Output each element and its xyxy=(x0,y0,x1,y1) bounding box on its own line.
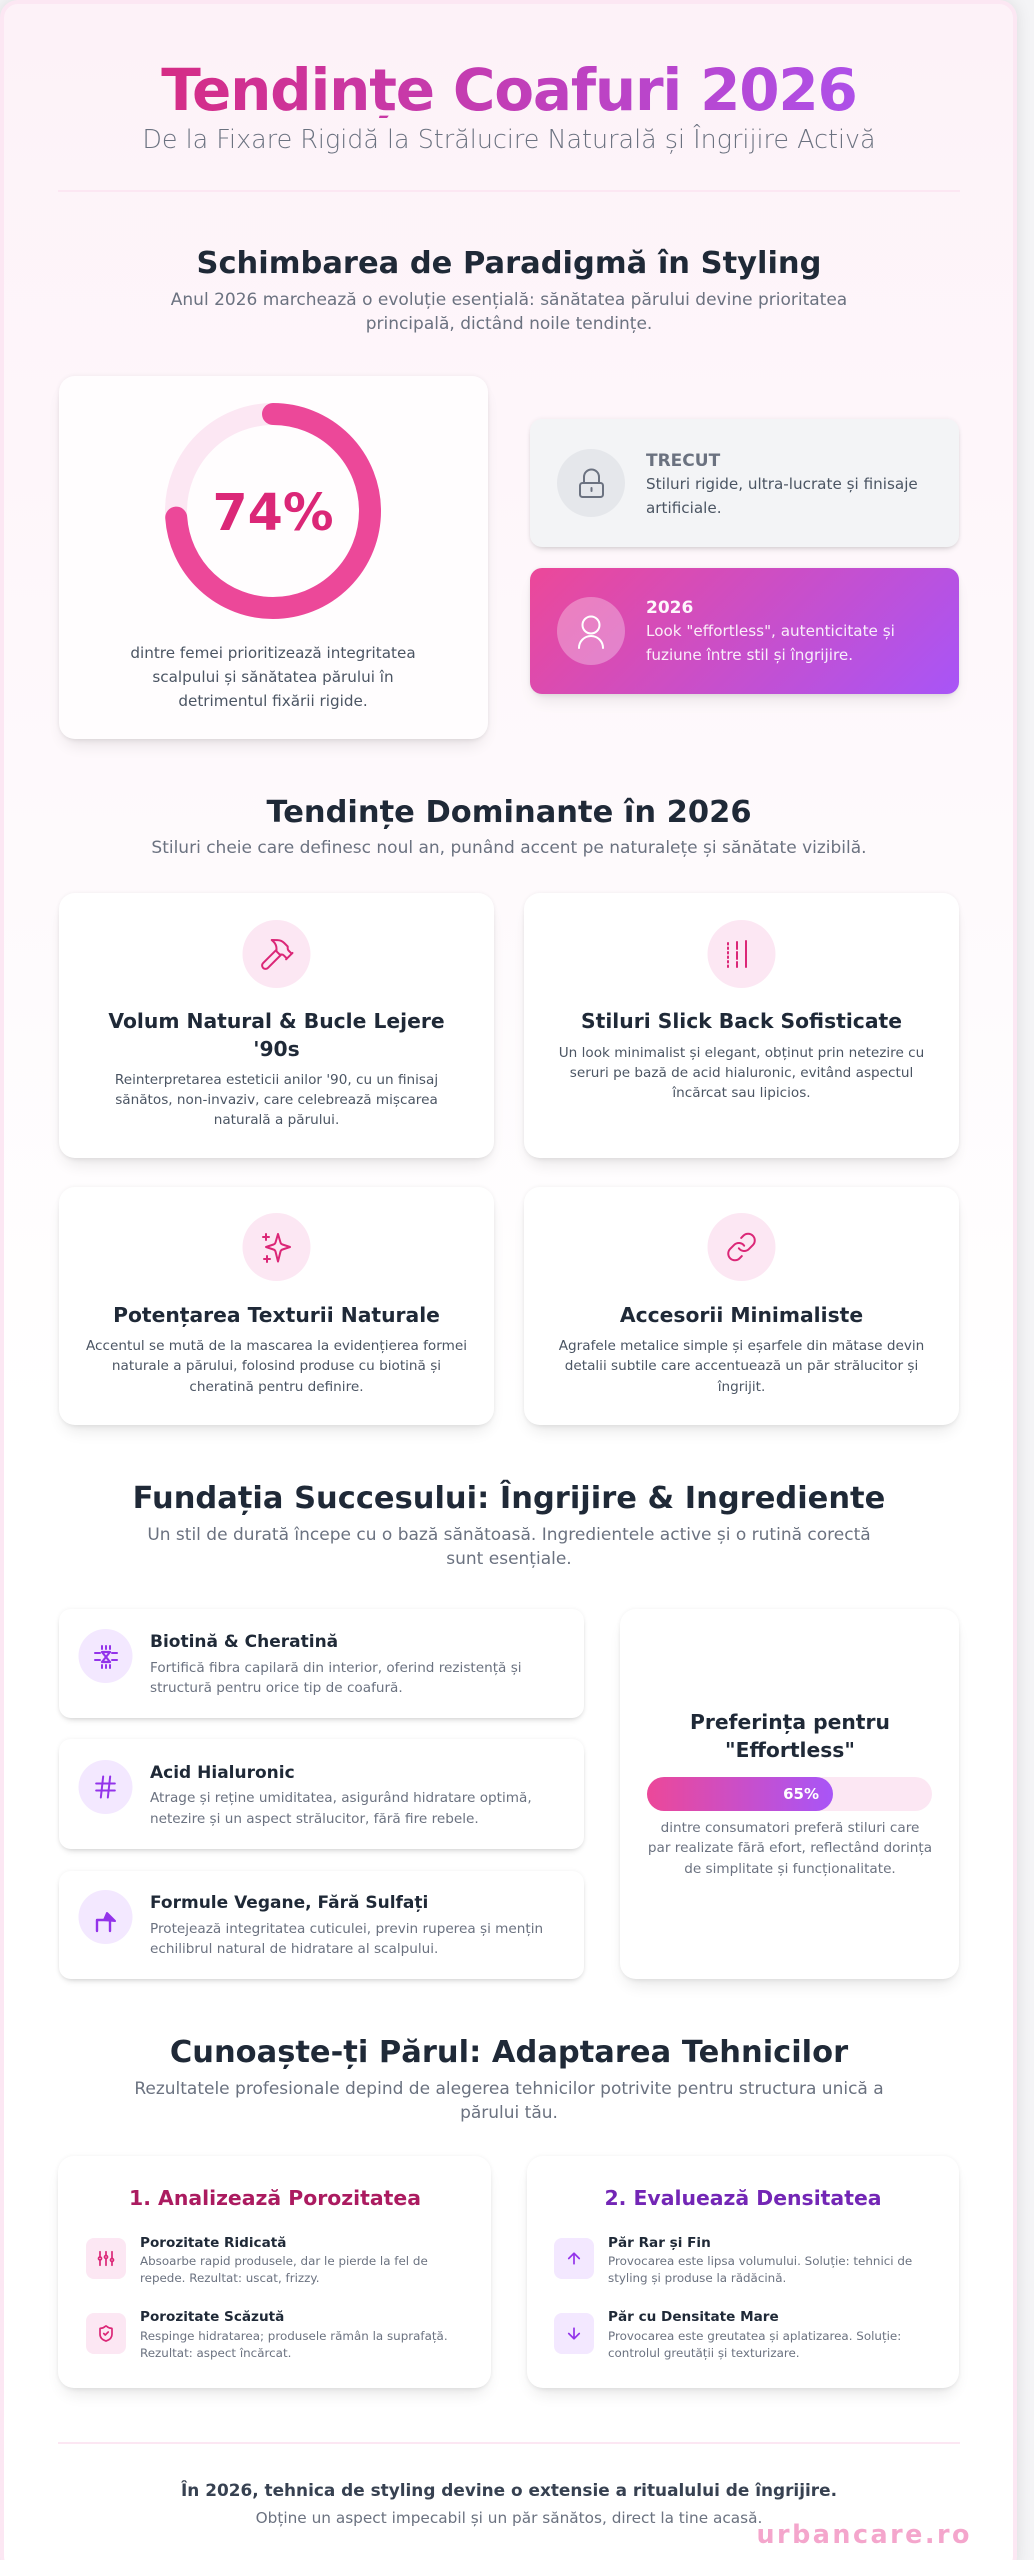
footer: Obține un aspect impecabil și un păr sănătos, direct la tine acasă. xyxy=(256,2509,762,2527)
panel: preferința effortless: "Effortless" xyxy=(725,1738,855,1762)
icon: arrow up xyxy=(554,2238,594,2279)
panel: slick back: încărcat sau lipicios. xyxy=(671,1085,811,1101)
panel: densitate: Provocarea este lipsa volumului. Soluție: tehnici de xyxy=(608,2254,912,2268)
section 4 heading: Rezultatele profesionale depind de alegerea tehnicilor potrivite pentru structura unică a xyxy=(134,2079,884,2099)
panel: acid hialuronic: netezire și un aspect strălucitor, fără fire rebele. xyxy=(150,1811,479,1827)
section 3 heading: Fundația Succesului: Îngrijire & Ingrediente xyxy=(133,1480,885,1516)
panel: 2026 xyxy=(530,568,959,694)
panel: acid hialuronic xyxy=(59,1739,584,1849)
panel: volum natural: naturală a părului. xyxy=(214,1112,339,1128)
panel: densitate: Provocarea este greutatea și aplatizarea. Soluție: xyxy=(608,2329,901,2343)
footer xyxy=(181,2479,837,2527)
panel: preferința effortless: dintre consumatori preferă stiluri care xyxy=(661,1820,919,1836)
panel: preferința effortless: de simplitate și funcționalitate. xyxy=(684,1861,896,1877)
statistic caption: scalpului și sănătatea părului în xyxy=(152,668,394,686)
panel: porozitate: Porozitate Ridicată xyxy=(140,2235,286,2251)
panel: accesorii: detalii subtile care accentuează un păr strălucitor și xyxy=(565,1358,918,1374)
2026 text xyxy=(646,598,895,664)
section 4 heading: Cunoaște-ți Părul: Adaptarea Tehnicilor xyxy=(170,2035,848,2070)
icon: hash xyxy=(78,1760,132,1814)
2026 text: fuziune între stil și îngrijire. xyxy=(646,646,853,664)
icon: strands xyxy=(708,920,776,988)
panel: texturi naturale: Accentul se mută de la mascarea la evidențierea formei xyxy=(86,1338,467,1354)
section 1 heading xyxy=(171,246,847,334)
panel: texturi naturale xyxy=(59,1187,494,1425)
icon: lock xyxy=(557,449,625,517)
panel: acid hialuronic: Atrage și reține umiditatea, asigurând hidratare optimă, xyxy=(150,1790,532,1806)
section 1 heading: Schimbarea de Paradigmă în Styling xyxy=(197,246,821,281)
icon: arrow down xyxy=(554,2313,594,2354)
panel: densitate: Păr cu Densitate Mare xyxy=(608,2309,779,2325)
section 2 heading: Stiluri cheie care definesc noul an, punând accent pe naturalețe și sănătate vizibilă. xyxy=(151,838,867,858)
panel: preferința effortless xyxy=(620,1609,959,1979)
panel: trecut xyxy=(530,419,959,547)
icon: link xyxy=(708,1213,776,1281)
panel: texturi naturale: cheratină pentru definire. xyxy=(189,1379,364,1395)
panel: preferința effortless: Preferința pentru xyxy=(690,1710,890,1734)
panel: formule vegane: Protejează integritatea cuticulei, previn ruperea și mențin xyxy=(150,1921,543,1937)
panel: accesorii: îngrijit. xyxy=(717,1379,765,1395)
panel: biotină: Biotină & Cheratină xyxy=(150,1632,338,1652)
panel: densitate: styling și produse la rădăcină. xyxy=(608,2271,786,2285)
progress bar: 65% xyxy=(647,1777,932,1811)
panel: densitate xyxy=(527,2156,959,2388)
icon: vegan xyxy=(78,1890,132,1944)
footer: În 2026, tehnica de styling devine o extensie a ritualului de îngrijire. xyxy=(181,2479,837,2500)
panel: porozitate: 1. Analizează Porozitatea xyxy=(129,2186,421,2210)
icon: sliders xyxy=(86,2238,126,2279)
section 3 heading: sunt esențiale. xyxy=(446,1549,572,1569)
section 1 heading: principală, dictând noile tendințe. xyxy=(366,314,652,334)
statistic caption xyxy=(130,644,416,710)
statistic caption: dintre femei prioritizează integritatea xyxy=(130,644,416,662)
2026 text: 2026 xyxy=(646,598,693,618)
section 2 heading xyxy=(151,795,867,858)
panel: porozitate: Absoarbe rapid produsele, dar le pierde la fel de xyxy=(140,2254,428,2268)
section 3 heading xyxy=(133,1480,885,1569)
panel: slick back: seruri pe bază de acid hialuronic, evitând aspectul xyxy=(570,1065,913,1081)
panel: volum natural xyxy=(59,893,494,1158)
watermark: urbancare.ro xyxy=(756,2519,972,2549)
subtitle: De la Fixare Rigidă la Strălucire Naturală și Îngrijire Activă xyxy=(142,124,876,154)
panel: formule vegane: Formule Vegane, Fără Sulfați xyxy=(150,1893,428,1913)
header xyxy=(145,66,873,154)
panel: porozitate: Rezultat: aspect încărcat. xyxy=(140,2346,291,2360)
panel: slick back: Stiluri Slick Back Sofisticate xyxy=(581,1009,902,1033)
panel: formule vegane: echilibrul natural de hidratare al scalpului. xyxy=(150,1941,438,1957)
panel: biotină: structură pentru orice tip de coafură. xyxy=(150,1680,403,1696)
section 4 heading: părului tău. xyxy=(460,2103,558,2123)
icon: biotin xyxy=(78,1629,132,1683)
panel: porozitate: Respinge hidratarea; produsele rămân la suprafață. xyxy=(140,2329,448,2343)
panel: accesorii: Agrafele metalice simple și eșarfele din mătase devin xyxy=(559,1338,924,1354)
panel: volum natural: Volum Natural & Bucle Lejere xyxy=(108,1009,445,1033)
panel: accesorii xyxy=(524,1187,959,1425)
panel: preferința effortless: par realizate fără efort, reflectând dorința xyxy=(648,1840,932,1856)
panel: densitate: Păr Rar și Fin xyxy=(608,2235,711,2251)
trecut text: artificiale. xyxy=(646,499,722,517)
progress bar: 65%: 65% xyxy=(783,1785,819,1803)
icon: person xyxy=(557,597,625,665)
panel: volum natural: '90s xyxy=(253,1037,300,1061)
section 3 heading: Un stil de durată începe cu o bază sănătoasă. Ingredientele active și o rutină corectă xyxy=(147,1525,871,1545)
panel: acid hialuronic: Acid Hialuronic xyxy=(150,1763,295,1783)
panel: densitate: 2. Evaluează Densitatea xyxy=(604,2186,882,2210)
panel: densitate: controlul greutății și texturizare. xyxy=(608,2346,800,2360)
panel: volum natural: sănătos, non-invaziv, care celebrează mișcarea xyxy=(115,1092,438,1108)
panel: biotină xyxy=(59,1609,584,1718)
panel: 74% statistic xyxy=(59,376,488,739)
statistic caption: detrimentul fixării rigide. xyxy=(178,692,368,710)
section 2 heading: Tendințe Dominante în 2026 xyxy=(266,795,752,830)
panel: slick back: Un look minimalist și elegant, obținut prin netezire cu xyxy=(559,1045,924,1061)
section 1 heading: Anul 2026 marchează o evoluție esențială: sănătatea părului devine prioritatea xyxy=(171,290,847,310)
donut chart: 74%: 74% xyxy=(212,483,334,542)
trecut text: Stiluri rigide, ultra-lucrate și finisaje xyxy=(646,475,918,493)
title: Tendințe Coafuri 2026 xyxy=(161,56,857,124)
trecut text: TRECUT xyxy=(646,451,721,471)
panel: slick back xyxy=(524,893,959,1158)
2026 text: Look "effortless", autenticitate și xyxy=(646,622,895,640)
section 4 heading xyxy=(134,2035,884,2123)
icon: sparkles xyxy=(242,1213,310,1281)
panel: porozitate: Porozitate Scăzută xyxy=(140,2309,284,2325)
panel: biotină: Fortifică fibra capilară din interior, oferind rezistență și xyxy=(150,1660,522,1676)
panel: accesorii: Accesorii Minimaliste xyxy=(620,1303,863,1327)
icon: hammer xyxy=(242,920,310,988)
panel: volum natural: Reinterpretarea esteticii anilor '90, cu un finisaj xyxy=(115,1072,438,1088)
panel: formule vegane xyxy=(59,1871,584,1979)
panel: porozitate xyxy=(58,2156,491,2388)
trecut text xyxy=(646,451,918,517)
panel: texturi naturale: naturale a părului, folosind produse cu biotină și xyxy=(112,1358,441,1374)
icon: shield xyxy=(86,2313,126,2354)
panel: porozitate: repede. Rezultat: uscat, frizzy. xyxy=(140,2271,320,2285)
panel: texturi naturale: Potențarea Texturii Naturale xyxy=(113,1303,440,1327)
donut chart: 74% xyxy=(176,414,370,608)
